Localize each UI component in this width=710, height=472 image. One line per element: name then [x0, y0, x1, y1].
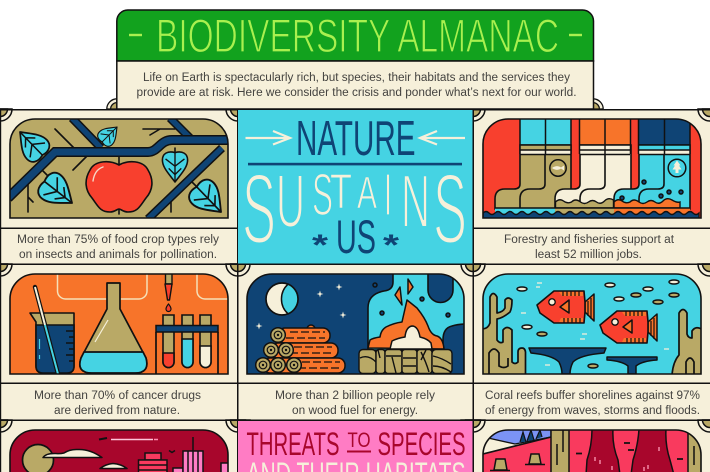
icon: tree stumps [490, 454, 545, 470]
icon: fish badge [550, 160, 566, 176]
heading: sustains: I [384, 162, 392, 228]
caption: Coral reefs buffer shorelines against 97% [485, 390, 700, 402]
heading: threats to species: SPECIES [378, 426, 466, 462]
icon: apple [86, 162, 152, 212]
plane trail [99, 438, 158, 440]
caption: on wood fuel for energy. [292, 405, 418, 417]
bubbles [620, 180, 683, 200]
panel: coral reefs [482, 274, 703, 417]
caption: are derived from nature. [54, 405, 180, 417]
panel: threats heading [238, 421, 472, 472]
icon: moon [266, 283, 298, 315]
heading: nature: NATURE [296, 112, 416, 166]
icon: flask [80, 283, 147, 373]
sky [483, 429, 551, 454]
heading: us: US [336, 210, 376, 263]
coral left [482, 294, 526, 375]
arrow left [246, 131, 290, 144]
header banner [117, 9, 594, 109]
title: BIODIVERSITY ALMANAC [156, 9, 559, 62]
heading: us: * [383, 229, 399, 262]
panel background grid [0, 99, 710, 472]
caption [34, 390, 201, 417]
coral right [672, 310, 703, 375]
illustration: laboratory [10, 272, 232, 374]
caption [17, 234, 219, 261]
icon: moon [22, 444, 54, 472]
heading: sustains: T [330, 165, 352, 219]
illustration: boots [483, 119, 701, 219]
caption: on insects and animals for pollination. [19, 249, 217, 261]
skyline [138, 437, 229, 472]
heading: sustains: S [312, 162, 333, 228]
icon: beaker [30, 287, 74, 374]
icon: table corals [529, 348, 657, 374]
intro text [136, 72, 576, 99]
icon: stones [359, 350, 452, 374]
caption: More than 2 billion people rely [275, 390, 435, 402]
panel: wood fuel [247, 272, 466, 417]
panel: forestry and fisheries [483, 119, 701, 261]
illustration: fire and logs [247, 272, 466, 374]
panel: cancer drugs [10, 272, 232, 417]
intro text: Life on Earth is spectacularly rich, but species, their habitats and the services they [143, 72, 570, 84]
illustration: apple tree [8, 118, 232, 222]
icon: fish 2 [600, 311, 657, 343]
heading: sustains: S [242, 153, 276, 264]
icon: tree badge [668, 159, 686, 177]
caption: More than 75% of food crop types rely [17, 234, 219, 246]
caption [504, 234, 675, 261]
caption: of energy from waves, storms and floods. [485, 405, 700, 417]
heading: sustains: A [357, 167, 377, 218]
panel: pollination [8, 118, 232, 261]
heading: sustains: S [433, 153, 467, 264]
panel: city [10, 430, 229, 472]
heading: threats to species: TO [348, 429, 370, 452]
pebbles [517, 280, 679, 368]
caption [275, 390, 435, 417]
icon: logs [256, 325, 345, 373]
illustration: reef [482, 274, 703, 375]
icon: flames [368, 279, 444, 349]
icon: fish 1 [537, 291, 594, 323]
intro text: provide are at risk. Here we consider the crisis and ponder what’s next for our world. [136, 87, 576, 99]
caption: More than 70% of cancer drugs [34, 390, 201, 402]
heading: sustains: U [276, 159, 305, 243]
arrow right [420, 131, 465, 144]
caption: least 52 million jobs. [535, 249, 642, 261]
heading: threats to species: THREATS [246, 426, 340, 462]
panel: nature sustains us [238, 110, 472, 264]
icon: test tubes [156, 315, 218, 374]
heading: sustains: N [401, 159, 430, 243]
caption: Forestry and fisheries support at [504, 234, 675, 246]
tree trunks [551, 430, 704, 472]
crimson trunks [586, 429, 674, 472]
heading: threats to species [246, 426, 466, 462]
heading: sustains [242, 153, 467, 264]
icon: dropper [165, 273, 172, 312]
caption [485, 390, 700, 417]
heading: us: * [312, 229, 328, 262]
clouds [43, 449, 127, 468]
panel: deforestation [483, 429, 704, 472]
boot hems [556, 199, 680, 208]
cyan smoke [368, 272, 466, 350]
